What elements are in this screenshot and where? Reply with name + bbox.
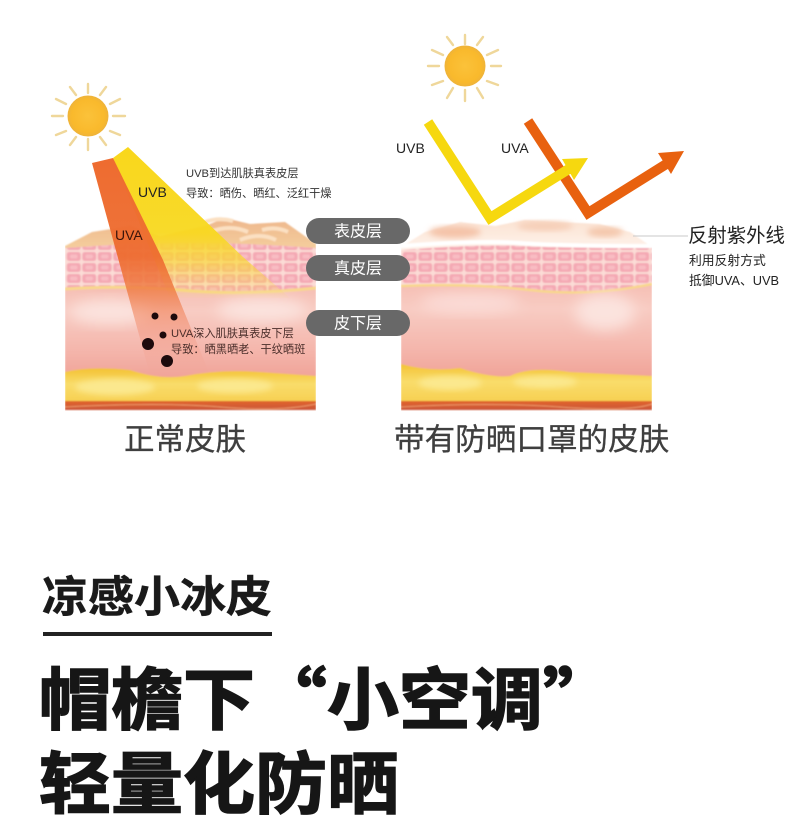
text: UVA effect note: UVA深入肌肤真表皮下层 — [171, 326, 294, 340]
label: UVB: UVB — [138, 184, 167, 200]
text: UVB effect note: UVB到达肌肤真表皮层 — [186, 166, 299, 180]
pill: epidermis: 表皮层 — [334, 222, 382, 240]
callout: reflect UV: 利用反射方式 — [689, 253, 766, 268]
layer labels — [306, 218, 410, 336]
text: UVA effect note — [171, 326, 305, 356]
sun: right — [428, 35, 501, 101]
leader line — [633, 235, 688, 237]
arrow: reflected UVB — [428, 122, 588, 218]
text: UVA effect note: 导致：晒黑晒老、干纹晒斑 — [171, 342, 305, 356]
headline — [39, 647, 615, 828]
arrow: reflected UVA — [528, 121, 684, 213]
label: UVB reflected: UVB — [396, 140, 425, 156]
label: UVA: UVA — [115, 227, 143, 243]
panel: normal skin diagram — [52, 84, 331, 410]
callout: reflect UV: 抵御UVA、UVB — [689, 273, 779, 288]
beam: UVB yellow — [113, 147, 290, 298]
callout: reflect UV: 反射紫外线 — [688, 225, 785, 247]
beam: UVA orange — [92, 158, 210, 375]
skin cross-section: normal skin — [65, 218, 316, 410]
panel: skin with sun-protective mask — [396, 35, 785, 410]
caption: masked skin: 带有防晒口罩的皮肤 — [394, 423, 669, 457]
pill: subcutis: 皮下层 — [334, 314, 382, 332]
label: UVA reflected: UVA — [501, 140, 529, 156]
headline: 轻量化防晒 — [39, 731, 399, 828]
subtitle underline — [43, 632, 272, 636]
pill: dermis: 真皮层 — [334, 260, 382, 278]
caption: normal skin: 正常皮肤 — [124, 423, 246, 457]
sun: left — [52, 84, 125, 150]
callout: reflect UV — [688, 225, 785, 288]
headline: 帽檐下“小空调” — [39, 647, 615, 744]
melanin spots — [142, 312, 178, 367]
subtitle: 凉感小冰皮 — [42, 574, 272, 622]
text: UVB effect note: 导致：晒伤、晒红、泛红干燥 — [186, 186, 331, 200]
text: UVB effect note — [186, 166, 331, 200]
skin cross-section: protected skin — [401, 220, 652, 410]
